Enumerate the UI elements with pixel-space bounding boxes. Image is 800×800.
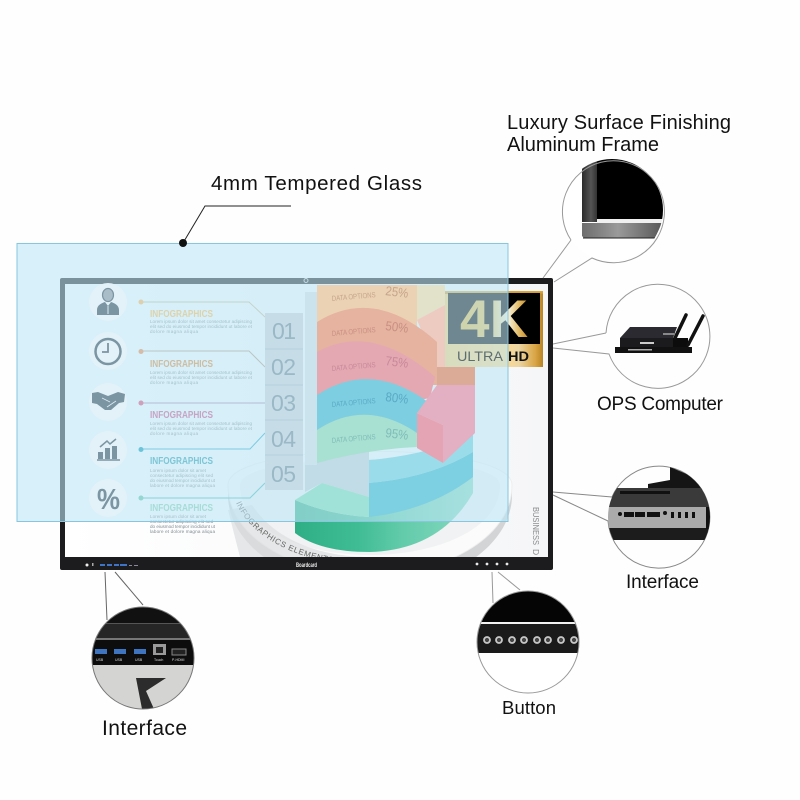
icon: person [89,283,127,321]
list headings: INFOGRAPHICS [150,503,213,514]
chart labels: 95% [385,425,410,443]
chart labels: 75% [385,353,410,371]
3D segmented chart [305,283,475,517]
frame callout: Aluminum Frame [507,134,659,156]
front interface callout: Interface [102,717,187,740]
disc caption: INFOGRAPHICS ELEMENTS [236,501,332,557]
4K Ultra HD badge: HD [508,348,529,364]
list headings: INFOGRAPHICS [150,359,213,370]
icon: growth chart [89,431,127,469]
OPS computer callout: OPS Computer [597,394,724,415]
body copy blocks [150,319,253,534]
number column [265,313,303,490]
glass panel [17,244,508,522]
chart labels: DATA OPTIONS [331,432,376,445]
body copy blocks: dolore magna aliqua [150,380,198,385]
glass callout label: 4mm Tempered Glass [211,172,422,195]
body copy blocks: do eiusmod tempor incididunt ut [150,478,216,483]
icon: percent: % [97,484,120,516]
chart labels: DATA OPTIONS [331,396,376,409]
4K Ultra HD badge: 4K [460,290,528,349]
number column: 05 [271,461,296,487]
chart labels: 50% [385,318,410,336]
body copy blocks: consectetur adipiscing elit sed [150,519,213,524]
body copy blocks: Lorem ipsum dolor sit amet [150,514,207,519]
bottom bezel controls: Boardcard [296,563,317,569]
list headings: INFOGRAPHICS [150,456,213,467]
front interface callout [90,572,196,740]
OPS computer callout [553,284,724,415]
body copy blocks: do eiusmod tempor incididunt ut [150,524,216,529]
chart labels: DATA OPTIONS [331,360,376,373]
front interface callout: P-HDMI [172,658,184,662]
body copy blocks: elit sed do eiusmod tempor incididunt ut labore et [150,324,253,329]
frame callout: Luxury Surface Finishing [507,112,731,134]
number column: 03 [271,390,296,416]
front interface callout: USB [96,658,104,662]
bottom bezel controls [86,563,508,569]
body copy blocks: labore et dolore magna aliqua [150,529,215,534]
body copy blocks: dolore magna aliqua [150,431,198,436]
list headings: INFOGRAPHICS [150,410,213,421]
body copy blocks: elit sed do eiusmod tempor incididunt ut labore et [150,375,253,380]
chart labels: DATA OPTIONS [331,290,376,303]
number column: 01 [272,318,296,344]
body copy blocks: Lorem ipsum dolor sit amet consectetur adipiscing [150,370,252,375]
rear interface callout [553,466,710,593]
chart labels: DATA OPTIONS [331,325,376,338]
frame callout [507,112,731,282]
infographic lines [141,302,265,498]
monitor frame [60,278,553,570]
screen content beneath the glass [143,291,543,557]
4K Ultra HD badge [445,290,543,367]
front interface callout: USB [135,658,143,662]
body copy blocks: labore et dolore magna aliqua [150,483,215,488]
chart labels: 80% [385,389,410,407]
chart labels: 25% [385,283,410,301]
body copy blocks: elit sed do eiusmod tempor incididunt ut labore et [150,426,253,431]
rear interface callout: Interface [626,572,699,593]
chart base segment [295,452,473,552]
badge caption seen through glass: ULTRA [457,348,504,364]
number column: 04 [271,426,296,452]
vertical side caption: BUSINESS D [531,507,541,555]
chart labels [331,283,410,445]
body copy blocks: consectetur adipiscing elit sed [150,473,213,478]
list headings [150,309,213,514]
body copy blocks: Lorem ipsum dolor sit amet [150,468,207,473]
number column: 02 [271,354,296,380]
button callout: Button [502,697,556,718]
body copy blocks: Lorem ipsum dolor sit amet consectetur adipiscing [150,319,252,324]
base disc [228,476,512,557]
body copy blocks: Lorem ipsum dolor sit amet consectetur adipiscing [150,421,252,426]
front interface callout: USB [115,658,123,662]
button callout [476,572,580,718]
list headings: INFOGRAPHICS [150,309,213,320]
icon: clock [89,332,127,370]
list dots [138,300,144,500]
body copy blocks: dolore magna aliqua [150,329,198,334]
icon: handshake [89,383,127,421]
icon: percent [89,479,127,517]
front interface callout: Touch [154,658,163,662]
glass callout label [179,172,422,247]
